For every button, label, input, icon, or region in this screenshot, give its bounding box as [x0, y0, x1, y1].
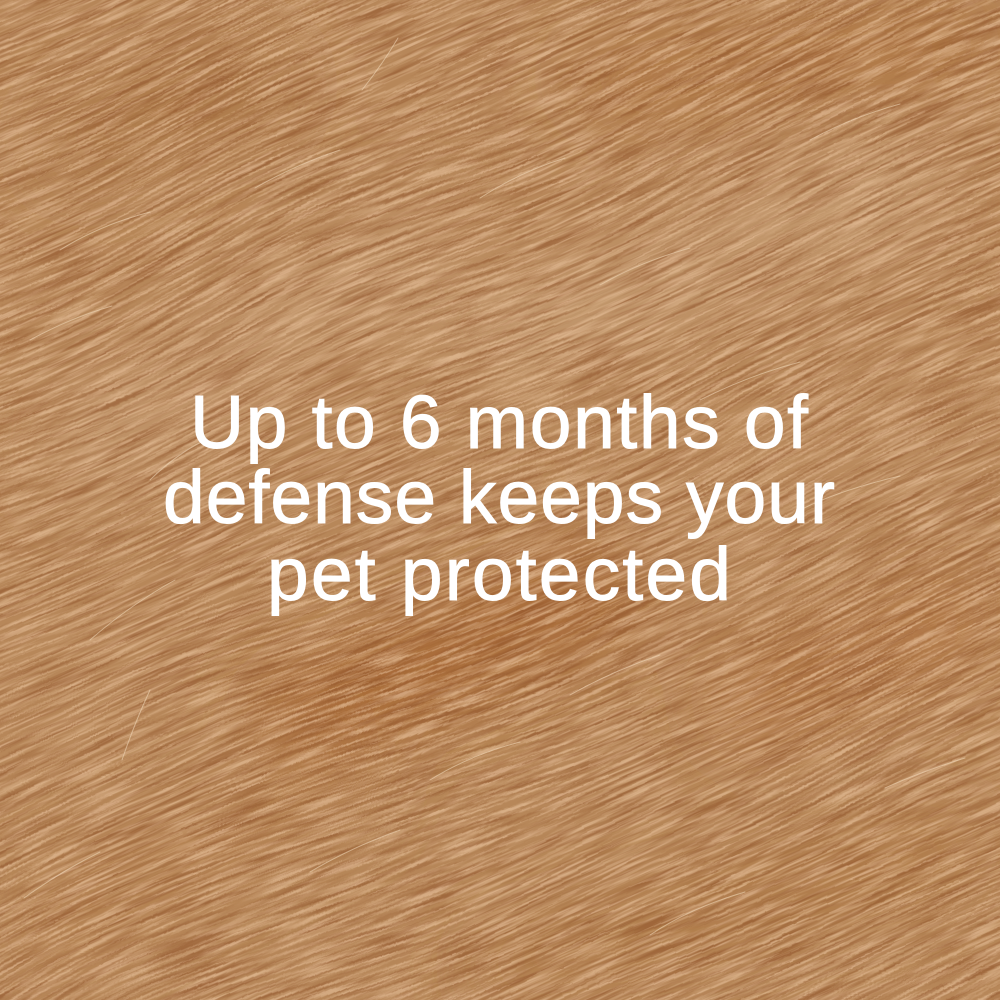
headline line 1: Up to 6 months of	[190, 380, 808, 464]
headline line 2: defense keeps your	[163, 455, 835, 539]
headline line 3: pet protected	[267, 532, 731, 616]
headline	[163, 380, 835, 616]
